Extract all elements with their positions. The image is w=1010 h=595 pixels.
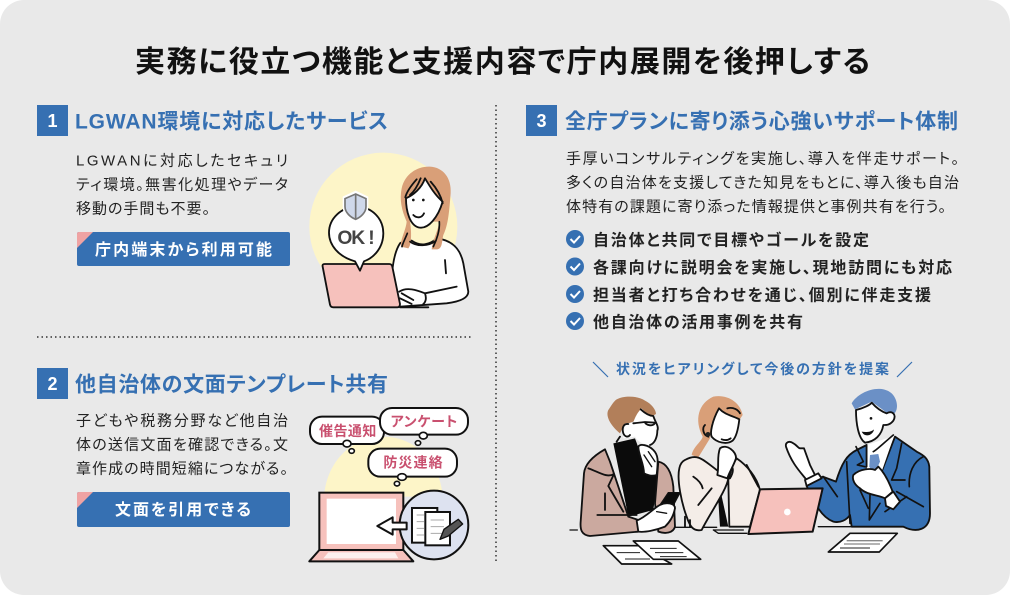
text block 3	[566, 150, 959, 216]
number badge 2: 2	[47, 374, 58, 394]
bubble: 催告通知: 催告通知	[319, 423, 376, 439]
button: 文面を引用できる: 文面を引用できる	[115, 501, 251, 519]
text block 1: 移動の手間も不要。	[76, 200, 210, 218]
text block 3: 多くの自治体を支援してきた知見をもとに、導入後も自治	[566, 174, 959, 192]
laptop	[748, 488, 823, 534]
text block 3: 体特有の課題に寄り添った情報提供と事例共有を行う。	[566, 198, 946, 216]
check item 4: 他自治体の活用事例を共有	[593, 312, 803, 332]
button: 文面を引用できる	[77, 492, 290, 527]
text block 2: 章作成の時間短縮につながる。	[76, 460, 288, 478]
heading 2: 他自治体の文面テンプレート共有	[75, 374, 388, 396]
button: 庁内端末から利用可能: 庁内端末から利用可能	[95, 240, 272, 259]
bubble: 防災連絡: 防災連絡	[383, 454, 443, 470]
checklist	[566, 230, 952, 332]
person: woman	[679, 396, 760, 533]
text block 2: 子どもや税務分野など他自治	[76, 412, 288, 430]
panel: section 2	[37, 368, 468, 561]
illustration: woman with laptop: OK !	[337, 228, 375, 249]
bubble: アンケート	[380, 408, 468, 445]
number badge 1	[37, 105, 68, 136]
heading 3: 全庁プランに寄り添う心強いサポート体制	[565, 110, 958, 134]
illustration: consultation meeting	[570, 389, 930, 564]
check item 1: 自治体と共同で目標やゴールを設定	[593, 230, 869, 250]
illustration: woman with laptop	[309, 153, 468, 307]
title: 実務に役立つ機能と支援内容で庁内展開を後押しする	[135, 46, 870, 79]
text block 3: 手厚いコンサルティングを実施し、導入を伴走サポート。	[566, 150, 959, 168]
check item 2: 各課向けに説明会を実施し、現地訪問にも対応	[593, 258, 952, 277]
number badge 1: 1	[47, 111, 58, 131]
text block 1: ティ環境。無害化処理やデータ	[76, 176, 288, 194]
number badge 2	[37, 368, 68, 399]
panel: section 3	[526, 105, 959, 564]
text block 2	[76, 412, 288, 478]
documents on table	[603, 541, 701, 564]
text block 2: 体の送信文面を確認できる。文	[76, 436, 288, 454]
bubble: 防災連絡	[368, 449, 457, 486]
number badge 3	[526, 105, 557, 136]
person: man in suit	[748, 389, 930, 552]
text block 1	[76, 152, 288, 218]
illustration: templates on laptop	[309, 408, 468, 561]
bubble: 催告通知	[310, 417, 384, 453]
check item 3: 担当者と打ち合わせを通じ、個別に伴走支援	[593, 286, 931, 304]
bubble: アンケート: アンケート	[391, 414, 457, 430]
person: man with glasses	[570, 397, 717, 536]
number badge 3: 3	[536, 111, 547, 131]
button: 庁内端末から利用可能	[77, 232, 290, 266]
heading 1: LGWAN環境に対応したサービス	[75, 110, 388, 134]
panel: section 1	[37, 105, 468, 307]
caption: 状況をヒアリングして今後の方針を提案	[616, 361, 889, 377]
text block 1: LGWANに対応したセキュリ	[76, 152, 288, 170]
document	[828, 533, 897, 552]
